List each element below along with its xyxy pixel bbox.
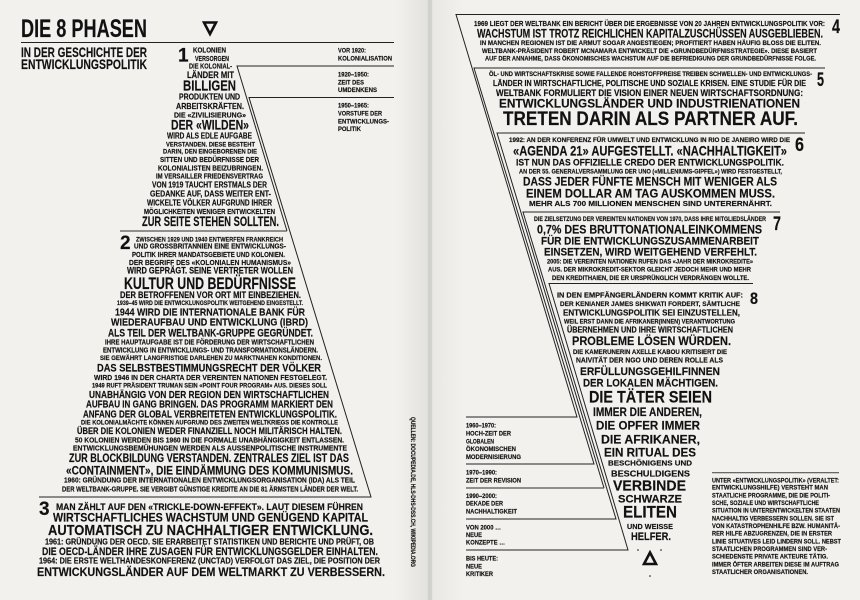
timeline legend: later periods: NEUE — [466, 532, 482, 539]
phase 4 text — [474, 17, 840, 63]
timeline legend: later periods: 1960–1970: — [466, 423, 496, 430]
phase 1 text: BILLIGEN — [183, 79, 236, 95]
timeline legend: early periods: VORSTUFE DER — [338, 111, 382, 118]
phase 1 text: VON 1919 TAUCHT ERSTMALS DER — [152, 181, 267, 190]
phase 5 text: TRETEN DARIN ALS PARTNER AUF. — [503, 109, 798, 130]
left page frame lines — [39, 66, 394, 497]
definition text block: STAATLICHER ORGANISATIONEN. — [712, 569, 808, 576]
timeline legend: later periods: ÖKONOMISCHEN — [466, 444, 516, 453]
phase 5 text: 5 — [817, 70, 824, 91]
phase 7 text: AUS. DER MIKROKREDIT-SEKTOR GLEICHT JEDOCH MEHR UND MEHR — [548, 267, 751, 274]
timeline legend: early periods: 1920–1950: — [338, 72, 369, 79]
timeline legend: early periods: 1950–1965: — [338, 103, 369, 110]
phase 6 text: DASS JEDER FÜNFTE MENSCH MIT WENIGER ALS — [523, 174, 777, 188]
timeline legend: later periods: NEUE — [466, 563, 482, 570]
timeline legend: later periods: DEKADE DER — [466, 501, 503, 508]
phase 2 text: WIRD 1946 IN DER CHARTA DER VEREINTEN NATIONEN FESTGELEGT. — [94, 373, 327, 382]
phase 8 text: NAIVITÄT DER NGO UND DEREN ROLLE ALS — [576, 356, 723, 365]
phase 8 text: BESCHULDIGENS — [611, 470, 690, 479]
phase 1 text: WIRD ALS EDLE AUFGABE — [167, 131, 252, 140]
phase 2 text: KULTUR UND BEDÜRFNISSE — [124, 274, 296, 293]
timeline legend: later periods: NACHHALTIGKEIT — [466, 508, 518, 515]
phase 3 text — [37, 499, 385, 579]
phase 1 text: IM VERSAILLER FRIEDENSVERTRAG — [156, 171, 263, 180]
phase 2 text: ZUR BLOCKBILDUNG VERSTANDEN. ZENTRALES ZIEL IST DAS — [69, 451, 349, 465]
phase 8 text: WEIL ERST DANN DIE AFRIKANER(INNEN) VERANTWORTUNG — [564, 319, 735, 326]
right page frame lines — [456, 14, 840, 550]
phase 2 text: IHRE HAUPTAUFGABE IST DIE FÖRDERUNG DER WIRTSCHAFTLICHEN — [105, 337, 314, 346]
phase 6 text: «AGENDA 21» AUFGESTELLT. «NACHHALTIGKEIT» — [513, 144, 787, 159]
phase 8 text: IN DEN EMPFÄNGERLÄNDERN KOMMT KRITIK AUF: — [557, 290, 743, 299]
timeline legend: later periods: HOCH-ZEIT DER — [466, 431, 511, 438]
phase 2 text: POLITIK IHRER MANDATSGEBIETE UND KOLONIEN. — [132, 250, 285, 259]
phase 2 text: 2 — [120, 233, 131, 254]
timeline legend: early periods: VOR 1920: — [338, 48, 366, 55]
phase 3 text: 3 — [39, 499, 50, 520]
phase 4 text: IN MANCHEN REGIONEN IST DIE ARMUT SOGAR ANGESTIEGEN; PROFITIERT HABEN HÄUFIG BLOSS DIE ELITEN. — [480, 39, 821, 47]
phase 1 text: DER «WILDEN» — [171, 118, 249, 133]
phase 2 text: ZWISCHEN 1929 UND 1940 ENTWERFEN FRANKREICH — [136, 236, 283, 243]
timeline legend: later periods: 1990–2000: — [466, 493, 497, 500]
phase 8 text: ERFÜLLUNGSGEHILFINNEN — [580, 365, 720, 378]
phase 2 text: SIE GEWÄHRT LANGFRISTIGE DARLEHEN ZU MARKTNAHEN KONDITIONEN. — [100, 354, 322, 362]
phase 1 text: MÖGLICHKEITEN WENIGER ENTWICKELTEN — [144, 207, 275, 216]
definition text block: ENTWICKLUNGSHILFE) VERSTEHT MAN — [712, 485, 828, 492]
phase 2 text: DIE KOLONIALMÄCHTE KÖNNEN AUFGRUND DES ZWEITEN WELTKRIEGS DIE KONTROLLE — [81, 420, 338, 427]
phase 8 text: BESCHÖNIGENS UND — [608, 459, 692, 468]
icon: downward triangle — [204, 22, 216, 34]
timeline legend: early periods: ZEIT DES — [338, 79, 364, 86]
timeline legend: later periods: VON 2000 … — [466, 524, 501, 531]
subtitle — [21, 44, 147, 72]
phase 6 text: EINEM DOLLAR AM TAG AUSKOMMEN MUSS. — [526, 186, 775, 200]
phase 2 text: DER WELTBANK-GRUPPE. SIE VERGIBT GÜNSTIGE KREDITE AN DIE 81 ÄRMSTEN LÄNDER DER WELT. — [62, 484, 358, 493]
phase 1 text: DARIN, DEN EINGEBORENEN DIE — [163, 149, 257, 156]
phase 1 text: LÄNDER MIT — [187, 70, 234, 81]
phase 7 text: DIE ZIELSETZUNG DER VEREINTEN NATIONEN VON 1970, DASS IHRE MITGLIEDSLÄNDER — [534, 216, 766, 223]
phase 8 text: DER KENIANER JAMES SHIKWATI FORDERT, SÄMTLICHE — [560, 300, 740, 308]
phase 3 text: 1964: DIE ERSTE WELTHANDESKONFERENZ (UNCTAD) VERFOLGT DAS ZIEL, DIE POSITION DER — [39, 556, 380, 566]
definition text block: VON KATASTROPHENHILFE BZW. HUMANITÄ- — [712, 522, 840, 530]
phase 2 text: DER BEGRIFF DES «KOLONIALEN HUMANISMUS» — [129, 258, 291, 267]
phase 2 text: 1944 WIRD DIE INTERNATIONALE BANK FÜR — [115, 305, 306, 318]
timeline legend: early periods: KOLONIALISATION — [338, 56, 392, 63]
phase 2 text: ENTWICKLUNGSBEMÜHUNGEN WERDEN ALS AUSSENPOLITISCHE INSTRUMENTE — [73, 444, 347, 453]
phase 6 text: IST NUN DAS OFFIZIELLE CREDO DER ENTWICKLUNGSPOLITIK. — [516, 157, 784, 167]
phase 3 text: AUTOMATISCH ZU NACHHALTIGER ENTWICKLUNG. — [48, 523, 373, 539]
phase 2 text: ALS TEIL DER WELTBANK-GRUPPE GEGRÜNDET. — [108, 326, 313, 339]
timeline legend: early periods: POLITIK — [338, 126, 361, 133]
phase 2 text: DER BETROFFENEN VOR ORT MIT EINBEZIEHEN. — [120, 290, 301, 300]
timeline legend: later periods: GLOBALEN — [466, 438, 494, 445]
phase 1 text: DIE KOLONIAL- — [189, 61, 232, 70]
phase 8 text: HELFER. — [631, 531, 671, 543]
phase 2 text: AUFBAU IN GANG BRINGEN. DAS PROGRAMM MARKIERT DEN — [86, 400, 333, 411]
timeline legend: early periods — [338, 48, 392, 133]
phase 8 text: DIE TÄTER SEIEN — [589, 389, 712, 407]
phase 8 text: SCHWARZE — [618, 493, 683, 505]
subtitle: ENTWICKLUNGSPOLITIK — [21, 56, 147, 72]
phase 6 text: 1992: AN DER KONFERENZ FÜR UMWELT UND ENTWICKLUNG IN RIO DE JANEIRO WIRD DIE — [509, 135, 791, 144]
phase 8 text: 8 — [750, 289, 758, 308]
phase 3 text: DIE OECD-LÄNDER IHRE ZUSAGEN FÜR ENTWICKLUNGSGELDER EINHALTEN. — [42, 545, 378, 558]
phase 2 text: DAS SELBSTBESTIMMUNGSRECHT DER VÖLKER — [97, 362, 321, 375]
phase 7 text: 0,7% DES BRUTTONATIONALEINKOMMENS — [537, 222, 762, 236]
phase 1 text: PRODUKTEN UND — [179, 92, 240, 102]
phase 3 text: WIRTSCHAFTLICHES WACHSTUM UND GENÜGEND KAPITAL — [53, 510, 368, 525]
phase 2 text — [62, 233, 358, 493]
phase 2 text: «CONTAINMENT», DIE EINDÄMMUNG DES KOMMUNISMUS. — [66, 463, 353, 477]
phase 1 text: WICKELTE VÖLKER AUFGRUND IHRER — [147, 199, 272, 208]
definition text block: SCHIEDENSTE PRIVATE AKTEURE TÄTIG. — [712, 552, 828, 560]
timeline legend: later periods — [466, 423, 521, 578]
phase 5 text: ÖL- UND WIRTSCHAFTSKRISE SOWIE FALLENDE ROHSTOFFPREISE TREIBEN SCHWELLEN- UND ENTWICKLUNGS- — [489, 69, 812, 78]
definition text block: RER HILFE ABZUGRENZEN, DIE IN ERSTER — [712, 531, 832, 538]
definition text block: STAATLICHE PROGRAMME, DIE DIE POLITI- — [712, 492, 830, 499]
timeline legend: later periods: KRITIKER — [466, 571, 493, 578]
phase 7 text: 7 — [773, 214, 781, 235]
phase 1 text: KOLONIEN — [193, 46, 226, 55]
phase 8 text: UND WEISSE — [627, 522, 673, 531]
phase 8 text: ÜBERNEHMEN UND IHRE WIRTSCHAFTLICHEN — [567, 326, 733, 335]
phase 1 text: VERSORGEN — [195, 54, 229, 63]
phase 1 text: ARBEITSKRÄFTEN. — [176, 101, 244, 111]
phase 2 text: ÜBER DIE KOLONIEN WEDER FINANZIELL NOCH MILITÄRISCH HALTEN. — [77, 426, 342, 436]
phase 8 text: DIE KAMERUNERIN AXELLE KABOU KRITISIERT DIE — [573, 349, 727, 356]
phase 1 text: GEDANKE AUF, DASS WEITER ENT- — [150, 190, 271, 199]
phase 3 text: MAN ZÄHLT AUF DEN «TRICKLE-DOWN-EFFEKT». LAUT DIESEM FÜHREN — [56, 502, 363, 513]
phase 2 text: WIRD GEPRÄGT. SEINE VERTRETER WOLLEN — [127, 266, 293, 276]
phase 8 text: PROBLEME LÖSEN WÜRDEN. — [572, 334, 731, 348]
phase 1 text: 1 — [178, 46, 189, 66]
definition text block: NACHHALTIG VERBESSERN SOLLEN. SIE IST — [712, 515, 835, 522]
phase 2 text: ANFANG DER GLOBAL VERBREITETEN ENTWICKLUNGSPOLITIK. — [83, 409, 337, 420]
phase 8 text: EIN RITUAL DES — [604, 446, 696, 460]
phase 8 text: DER LOKALEN MÄCHTIGEN. — [583, 377, 718, 390]
timeline legend: later periods: KONZEPTE … — [466, 540, 505, 547]
phase 7 text: DEN KREDITHAIEN, DIE ER URSPRÜNGLICH VERDRÄNGEN WOLLTE. — [552, 275, 749, 282]
timeline legend: early periods: UMDENKENS — [338, 87, 377, 94]
phase 5 text: ENTWICKLUNGSLÄNDER UND INDUSTRIENATIONEN — [499, 96, 800, 111]
icon: upward triangle with dots — [637, 549, 662, 577]
phase 6 text: AN DER 55. GENERALVERSAMMLUNG DER UNO («MILLENIUMS-GIPFEL») WIRD FESTGESTELLT, — [519, 168, 782, 175]
phase 7 text: 2005: DIE VEREINTEN NATIONEN RUFEN DAS «JAHR DER MIKROKREDITE» — [547, 258, 754, 265]
phase 7 text: EINSETZEN, WIRD WEITGEHEND VERFEHLT. — [544, 246, 757, 258]
phase 2 text: 50 KOLONIEN WERDEN BIS 1960 IN DIE FORMALE UNABHÄNGIGKEIT ENTLASSEN. — [75, 435, 344, 444]
phase 8 text: VERBINDE — [613, 479, 686, 495]
definition text block — [712, 473, 842, 576]
phase 2 text: 1949 RUFT PRÄSIDENT TRUMAN SEIN «POINT FOUR PROGRAM» AUS. DIESES SOLL — [92, 382, 327, 390]
phase 2 text: 1960: GRÜNDUNG DER INTERNATIONALEN ENTWICKLUNGSORGANISATION (IDA) ALS TEIL — [64, 476, 355, 485]
phase 8 text: IMMER DIE ANDEREN, — [593, 405, 702, 419]
phase 4 text: 4 — [832, 17, 840, 38]
phase 4 text: WELTBANK-PRÄSIDENT ROBERT MCNAMARA ENTWICKELT DIE «GRUNDBEDÜRFNISSTRATEGIE». DIESE BASIERT — [482, 46, 818, 55]
phase 5 text: LÄNDER IN WIRTSCHAFTLICHE, POLITISCHE UND SOZIALE KRISEN. EINE STUDIE FÜR DIE — [493, 79, 806, 88]
phase 6 text — [509, 135, 804, 208]
phase 8 text — [557, 289, 758, 543]
phase 1 text: SITTEN UND BEDÜRFNISSE DER — [160, 155, 260, 164]
phase 1 text — [142, 46, 279, 229]
phase 8 text: DIE OPFER IMMER — [596, 418, 700, 432]
timeline legend: later periods: ZEIT DER REVISION — [466, 477, 521, 484]
phase 2 text: UNABHÄNGIG VON DER REGION DEN WIRTSCHAFTLICHEN — [89, 388, 329, 401]
phase 1 text: ZUR SEITE STEHEN SOLLTEN. — [142, 213, 279, 229]
phase 2 text: WIEDERAUFBAU UND ENTWICKLUNG (IBRD) — [111, 318, 308, 329]
subtitle: IN DER GESCHICHTE DER — [21, 44, 147, 60]
timeline legend: later periods: MODERNISIERUNG — [466, 454, 521, 461]
phase 2 text: UND GROSSBRITANNIEN EINE ENTWICKLUNGS- — [134, 242, 287, 251]
phase 6 text: 6 — [795, 135, 804, 156]
phase 7 text: FÜR DIE ENTWICKLUNGSZUSAMMENARBEIT — [541, 234, 759, 247]
definition text block: SCHE, SOZIALE UND WIRTSCHAFTLICHE — [712, 500, 819, 507]
phase 2 text: 1939–45 WIRD DIE ENTWICKLUNGSPOLITIK WEITGEHEND EINGESTELLT. — [117, 300, 303, 307]
timeline legend: later periods: 1970–1990: — [466, 470, 497, 477]
phase 5 text: WELTBANK FORMULIERT DIE VISION EINER NEUEN WIRTSCHAFTSORDNUNG: — [496, 88, 803, 98]
phase 2 text: ENTWICKLUNG IN ENTWICKLUNGS- UND TRANSFORMATIONSLÄNDERN. — [103, 345, 318, 354]
timeline legend: later periods: BIS HEUTE: — [466, 555, 498, 562]
definition text block: IMMER ÖFTER ARBEITEN DIESE IM AUFTRAG — [712, 559, 839, 568]
phase 3 text: ENTWICKUNGSLÄNDER AUF DEM WELTMARKT ZU VERBESSERN. — [37, 564, 385, 579]
phase 5 text — [489, 69, 824, 130]
phase 1 text: VERSTANDEN. DIESE BESTEHT — [166, 141, 256, 148]
phase 7 text — [534, 214, 781, 282]
phase 6 text: MEHR ALS 700 MILLIONEN MENSCHEN SIND UNTERERNÄHRT. — [529, 199, 772, 208]
phase 8 text: ENTWICKLUNGSPOLITIK SEI EINZUSTELLEN, — [563, 308, 740, 318]
timeline legend: early periods: ENTWICKLUNGS- — [338, 118, 389, 125]
phase 8 text: ELITEN — [623, 503, 677, 522]
definition text block: STAATLICHEN PROGRAMMEN SIND VER- — [712, 546, 827, 553]
phase 8 text: DIE AFRIKANER, — [601, 432, 700, 446]
phase 3 text: 1961: GRÜNDUNG DER OECD. SIE ERARBEITET STATISTIKEN UND BERICHTE UND PRÜFT, OB — [45, 536, 374, 546]
phase 1 text: KOLONIALISTEN BEIZUBRINGEN. — [158, 163, 263, 172]
title: DIE 8 PHASEN — [21, 15, 147, 43]
phase 1 text: DIE «ZIVILISIERUNG» — [174, 110, 246, 119]
